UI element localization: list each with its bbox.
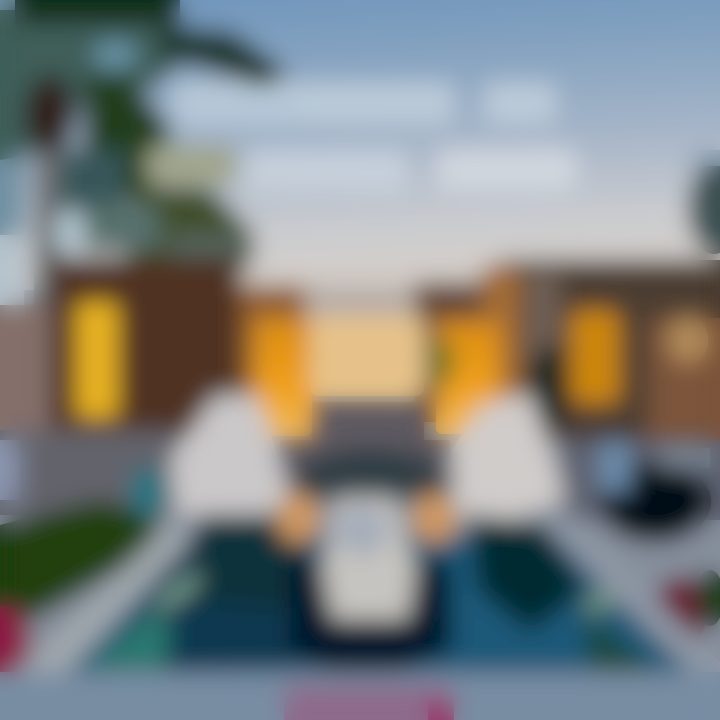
palm tree: left foliage [0, 0, 302, 310]
shrub: small teal [130, 466, 166, 518]
villa: building body [0, 258, 720, 448]
tree: right edge foliage [688, 150, 720, 254]
fountain: dark basin [290, 560, 452, 672]
flowers: left crimson [0, 606, 30, 674]
pillars: white left and right [170, 395, 292, 528]
villa: glowing windows [76, 302, 708, 436]
lawn: left green [0, 500, 158, 628]
pool: water [65, 515, 705, 672]
fountain: upper dome [276, 448, 456, 544]
courtyard: grey paving [0, 440, 720, 720]
title: illegible blurred headline bands [172, 82, 576, 190]
foreground: pink badge [284, 686, 454, 720]
fountain: white statue [322, 496, 416, 620]
car: right dark [599, 462, 711, 542]
foreground: grey-blue ledge [0, 672, 720, 720]
flowers: right planting [656, 576, 708, 644]
sky [0, 0, 720, 290]
paths: diagonal walkways [0, 508, 720, 720]
